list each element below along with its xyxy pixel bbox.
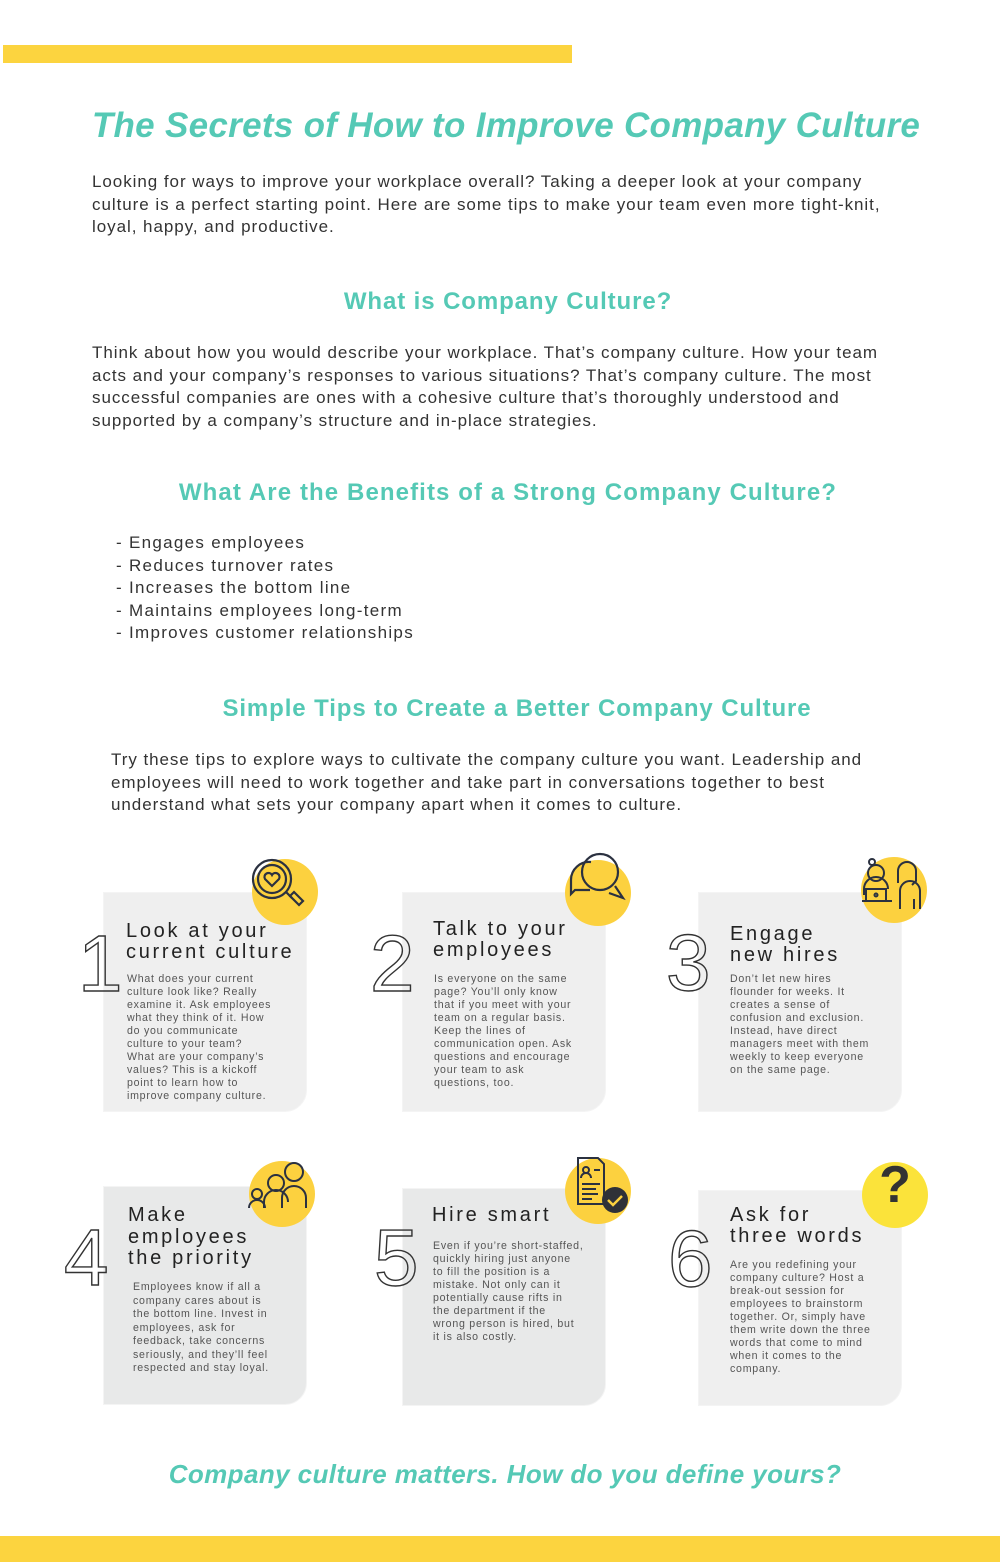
body 6: company culture? Host a [730,1272,864,1284]
title 4: Make [128,1204,188,1226]
heading: what is: What is Company Culture? [344,288,672,315]
body 6: them write down the three [730,1324,871,1336]
body 2: communication open. Ask [434,1038,572,1050]
icon: people at laptop [861,857,927,923]
text: what is: acts and your company’s responses to various situations? That’s company culture. The most [92,366,872,384]
benefits list: - Maintains employees long-term [116,600,403,620]
body 4: the bottom line. Invest in [133,1308,267,1320]
body 1: values? This is a kickoff [127,1064,257,1076]
text: what is: Think about how you would describe your workplace. That’s company culture. How your team [92,343,878,362]
body 1: do you communicate [127,1025,238,1037]
title 4 [128,1204,254,1269]
body 5: the department if the [433,1305,546,1317]
body 1: culture look like? Really [127,986,257,998]
benefits list [116,533,414,642]
bottom yellow bar [0,1536,1000,1562]
card 6 [671,1156,928,1406]
body 4: respected and stay loyal. [133,1362,269,1374]
intro text: loyal, happy, and productive. [92,217,335,236]
heading: benefits: What Are the Benefits of a Strong Company Culture? [179,479,837,506]
title: The Secrets of How to Improve Company Culture [92,106,920,145]
body 6 [730,1259,871,1375]
body 3: weekly to keep everyone [730,1051,864,1063]
body 6: break-out session for [730,1285,845,1297]
text: tips intro: employees will need to work together and take part in conversations together to best [111,772,825,792]
text: tips intro [111,750,862,814]
body 5: wrong person is hired, but [433,1318,574,1330]
intro text [92,172,881,236]
icon: question mark: ? [879,1156,911,1214]
benefits list: - Reduces turnover rates [116,556,334,574]
body 4: company cares about is [133,1294,261,1306]
body 6: employees to brainstorm [730,1298,863,1310]
body 1: examine it. Ask employees [127,999,271,1011]
top yellow bar [3,45,572,63]
body 3: confusion and exclusion. [730,1012,864,1024]
body 6: words that come to mind [730,1337,863,1349]
text: tips intro: understand what sets your company apart when it comes to culture. [111,795,682,814]
title 5: Hire smart [432,1204,551,1226]
icon: group of people [248,1161,315,1227]
title 4: employees [128,1226,249,1248]
body 1: What are your company’s [127,1051,264,1063]
body 6: company. [730,1363,781,1375]
body 1: What does your current [127,973,254,985]
body 5: Even if you’re short-staffed, [433,1240,584,1252]
title 6 [730,1204,864,1247]
title 2 [433,918,568,961]
body 5: it is also costly. [433,1331,517,1343]
body 1: improve company culture. [127,1090,266,1102]
icon: magnifier heart [252,858,318,925]
text: what is: successful companies are ones with a cohesive culture that’s thoroughly understood and [92,388,840,407]
card 4 [65,1161,315,1405]
title 4: the priority [128,1247,254,1269]
card 1 [83,858,318,1112]
text: tips intro: Try these tips to explore ways to cultivate the company culture you want. Leadership and [111,750,862,769]
body 5: to fill the position is a [433,1266,550,1278]
body 2: your team to ask [434,1064,524,1076]
body 2: questions and encourage [434,1051,570,1063]
title 6: Ask for [730,1204,811,1226]
body 6: Are you redefining your [730,1259,857,1271]
text: what is [92,343,878,430]
title 3: Engage [730,923,815,945]
card 3 [668,857,927,1112]
body 5: quickly hiring just anyone [433,1253,571,1265]
body 3 [730,973,869,1076]
body 1 [127,973,271,1102]
body 4: employees, ask for [133,1322,235,1334]
body 3: flounder for weeks. It [730,986,845,998]
body 5: potentially cause rifts in [433,1292,563,1304]
text: what is: supported by a company’s structure and in-place strategies. [92,410,598,430]
intro text: culture is a perfect starting point. Here are some tips to make your team even more tight-knit, [92,194,881,214]
body 3: Instead, have direct [730,1025,837,1037]
body 2: Is everyone on the same [434,973,567,985]
benefits list: - Improves customer relationships [116,623,414,642]
body 3: on the same page. [730,1064,831,1076]
body 2: page? You’ll only know [434,986,558,998]
title 1 [126,920,294,963]
intro text: Looking for ways to improve your workplace overall? Taking a deeper look at your company [92,172,862,191]
body 6: together. Or, simply have [730,1311,866,1323]
body 2: Keep the lines of [434,1025,526,1037]
title 2: employees [433,939,554,961]
body 4: Employees know if all a [133,1281,261,1293]
benefits list: - Increases the bottom line [116,578,351,597]
title 1: Look at your [126,920,268,942]
icon: speech bubbles [565,852,631,926]
body 2: team on a regular basis. [434,1012,566,1024]
body 5: mistake. Not only can it [433,1279,561,1291]
closing tagline: Company culture matters. How do you define yours? [169,1459,841,1489]
card 2 [373,852,631,1112]
body 3: managers meet with them [730,1038,869,1050]
body 3: Don’t let new hires [730,973,831,985]
icon: resume check [565,1157,631,1224]
title 3: new hires [730,944,840,966]
body 2: questions, too. [434,1077,514,1089]
title 1: current culture [126,941,294,963]
benefits list: - Engages employees [116,533,305,552]
body 2 [434,973,572,1089]
body 6: when it comes to the [730,1350,842,1362]
body 3: creates a sense of [730,999,830,1011]
body 1: what they think of it. How [127,1012,264,1024]
heading: tips: Simple Tips to Create a Better Company Culture [222,695,812,722]
body 4 [133,1281,269,1374]
body 2: that if you meet with your [434,999,571,1011]
body 4: seriously, and they’ll feel [133,1348,268,1360]
card 5 [376,1157,631,1406]
body 4: feedback, take concerns [133,1335,265,1347]
title 2: Talk to your [433,918,568,940]
title 6: three words [730,1225,864,1247]
body 1: culture to your team? [127,1038,242,1050]
body 1: point to learn how to [127,1077,238,1089]
title 3 [730,923,840,966]
body 5 [433,1240,584,1343]
icon: question mark [862,1156,928,1228]
